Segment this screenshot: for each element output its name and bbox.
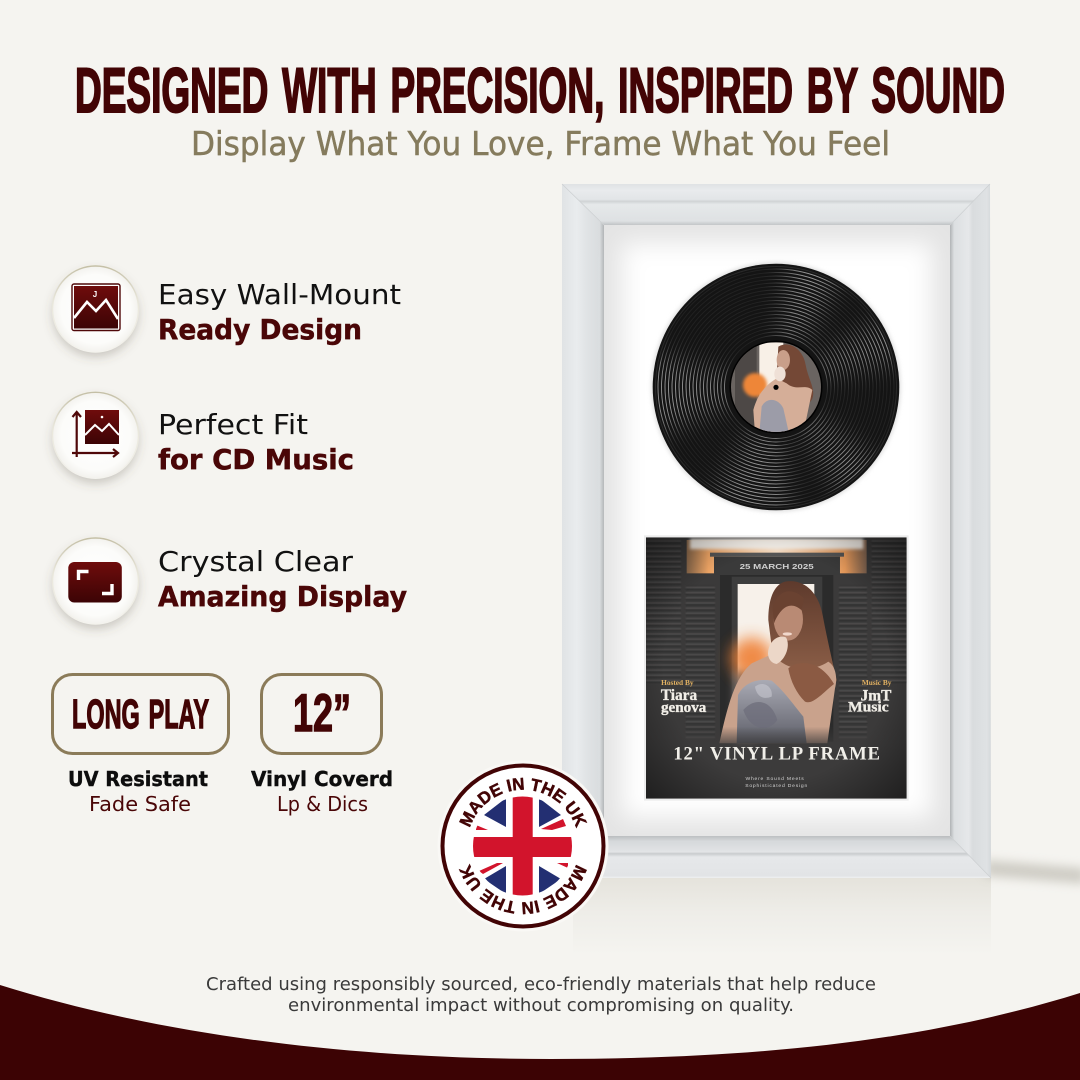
dress	[737, 680, 807, 743]
cover tagline	[746, 776, 807, 788]
music by credit: Music	[848, 700, 889, 716]
badge bottom text: MADE IN THE UK	[458, 864, 587, 914]
feature: perfect fit	[52, 392, 354, 478]
album cover poster	[644, 535, 909, 801]
caption: vinyl covered	[251, 767, 393, 816]
white mat board	[604, 225, 950, 836]
subtitle: Display What You Love, Frame What You Feel	[191, 124, 890, 163]
icon: display screen	[52, 538, 138, 624]
hosted by credit: Hosted By	[661, 678, 694, 687]
text: for cd music: for CD Music	[158, 443, 354, 476]
music by credit: JmT	[861, 688, 891, 705]
caption: uv resistant: Fade Safe	[89, 792, 191, 816]
footer note	[206, 974, 876, 1016]
face	[774, 606, 803, 641]
feature: crystal clear	[52, 538, 407, 624]
caption: vinyl covered: Vinyl Coverd	[251, 767, 393, 791]
hosted by credit: Tiara	[661, 687, 697, 704]
window header	[710, 553, 844, 743]
bottom fade	[646, 727, 907, 799]
front hair lock	[788, 663, 834, 702]
back hair	[768, 581, 837, 682]
vinyl record	[652, 262, 900, 512]
floor reflection and shadow	[573, 860, 1080, 958]
singer	[719, 581, 837, 743]
hosted by credit: genova	[661, 700, 707, 716]
cover title: 12" VINYL LP FRAME	[673, 743, 880, 764]
text: perfect fit: Perfect Fit	[158, 408, 308, 441]
text: ready design: Ready Design	[158, 313, 362, 346]
top window glow	[687, 540, 867, 573]
shoulders and arm	[719, 655, 836, 743]
hosted by credit	[661, 678, 707, 716]
record grooves	[658, 269, 894, 505]
music by credit: Music By	[862, 678, 892, 687]
icon: wall mount badge	[52, 266, 138, 352]
icon: size arrows and picture	[52, 392, 138, 478]
caption: vinyl covered: Lp & Dics	[277, 792, 368, 816]
music by credit	[848, 680, 892, 712]
shutters	[646, 540, 907, 738]
badge: long play: LONG PLAY	[72, 691, 209, 737]
frame moulding	[562, 184, 991, 878]
caption: uv resistant: UV Resistant	[68, 767, 208, 791]
text: crystal clear: Crystal Clear	[158, 545, 354, 578]
badge: long play	[52, 674, 228, 754]
cover tagline: Where Sound Meets	[745, 776, 805, 782]
icon: wall mount badge: J	[93, 290, 97, 299]
record label photo	[730, 340, 823, 433]
cover tagline: Sophisticated Design	[745, 783, 808, 789]
union flag	[470, 795, 576, 897]
hand and microphone	[768, 637, 788, 664]
footer note: environmental impact without compromising on quality.	[288, 995, 794, 1016]
badge top text: MADE IN THE UK	[459, 778, 588, 828]
text: easy wall-mount: Easy Wall-Mount	[158, 278, 401, 311]
text: amazing display: Amazing Display	[158, 580, 407, 613]
badge: 12 inch	[262, 674, 382, 754]
badge: made in the uk	[440, 764, 608, 928]
badge: 12 inch: 12”	[293, 684, 351, 743]
bright window	[738, 584, 814, 682]
bottom maroon curve	[0, 985, 1080, 1080]
feature: wall mount	[52, 266, 401, 352]
lower window tones and orange flare	[731, 638, 772, 747]
footer note: Crafted using responsibly sourced, eco-friendly materials that help reduce	[206, 974, 876, 995]
panel: picture frame	[562, 184, 991, 878]
caption: uv resistant	[68, 767, 208, 816]
date text: 25 MARCH 2025	[740, 562, 814, 571]
